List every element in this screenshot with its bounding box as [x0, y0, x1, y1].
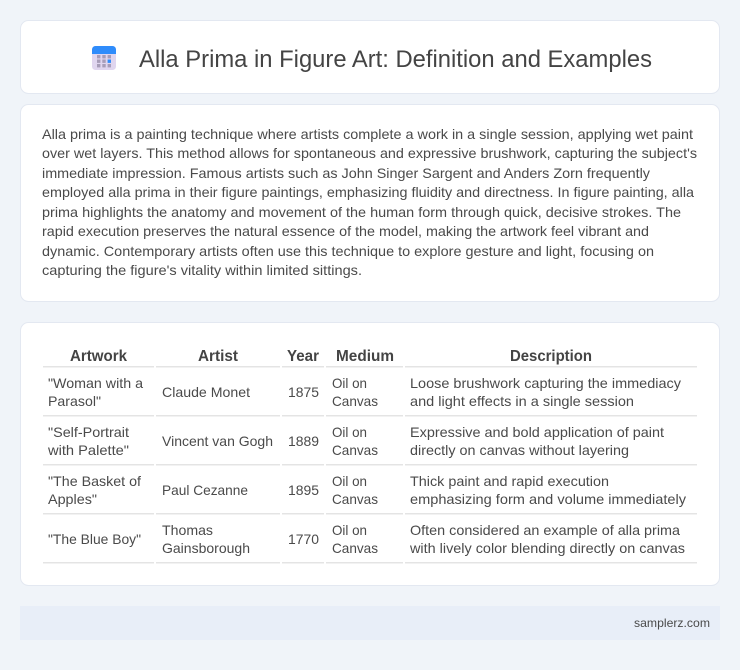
- table row: The Blue Boy: Oil on: [332, 522, 367, 538]
- table row: Woman with a Parasol: Parasol": [48, 393, 101, 409]
- text block: definition paragraph: Alla prima is a painting technique where artists complete a work in a single session, applying wet paint: [42, 126, 693, 142]
- table row: The Basket of Apples: Canvas: [332, 491, 378, 507]
- table row: Self-Portrait with Palette: Canvas: [332, 442, 378, 458]
- footer: [20, 606, 720, 640]
- table row: The Blue Boy: 1770: [288, 531, 319, 547]
- footer: samplerz.com: [634, 616, 710, 630]
- table row: The Basket of Apples: "The Basket of: [48, 473, 141, 489]
- table row: The Basket of Apples: Oil on: [332, 473, 367, 489]
- table row: Woman with a Parasol: Oil on: [332, 375, 367, 391]
- table row: Self-Portrait with Palette: [47, 424, 664, 458]
- table row: Self-Portrait with Palette: "Self-Portrait: [48, 424, 129, 440]
- table row: Woman with a Parasol: Loose brushwork capturing the immediacy: [410, 375, 681, 391]
- table header row: Artwork: [70, 348, 127, 365]
- table row: Woman with a Parasol: Canvas: [332, 393, 378, 409]
- table row: The Blue Boy: Thomas: [162, 522, 213, 538]
- text block: definition paragraph: capturing the figure's vitality within limited sittings.: [42, 262, 362, 278]
- panel: artwork table: [20, 322, 720, 586]
- table row: Woman with a Parasol: [48, 375, 681, 409]
- text block: definition paragraph: dynamic. Contemporary artists often use this technique to explore gesture and light, focusing on: [42, 243, 654, 259]
- table row: Self-Portrait with Palette: Oil on: [332, 424, 367, 440]
- table row: The Blue Boy: "The Blue Boy": [48, 531, 141, 547]
- table header row: Artist: [198, 348, 238, 365]
- table row: Self-Portrait with Palette: with Palette": [47, 442, 129, 458]
- text block: definition paragraph: over wet layers. This method allows for spontaneous and expressive brushwork, capturing the subject's: [42, 145, 697, 161]
- table row: The Blue Boy: with lively color blending directly on canvas: [409, 540, 685, 556]
- table header row: Medium: [336, 348, 394, 365]
- panel: definition text: [20, 104, 720, 302]
- table row: Self-Portrait with Palette: Vincent van Gogh: [162, 433, 273, 449]
- table row: Self-Portrait with Palette: 1889: [288, 433, 319, 449]
- table row: The Basket of Apples: 1895: [288, 482, 319, 498]
- text block: definition paragraph: rapid execution preserves the natural essence of the model, making the artwork feel vibrant and: [42, 223, 649, 239]
- table row: The Basket of Apples: Apples": [48, 491, 97, 507]
- table row: Self-Portrait with Palette: Expressive and bold application of paint: [410, 424, 664, 440]
- table row: Woman with a Parasol: and light effects in a single session: [410, 393, 634, 409]
- table row: The Basket of Apples: [48, 473, 686, 507]
- table row: The Basket of Apples: Paul Cezanne: [162, 482, 248, 498]
- table row: The Blue Boy: Canvas: [332, 540, 378, 556]
- text block: definition paragraph: prima highlights the anatomy and movement of the human form through quick, decisive strokes. The: [42, 204, 681, 220]
- table header row: [70, 348, 592, 365]
- table row: The Basket of Apples: Thick paint and rapid execution: [410, 473, 609, 489]
- table row: Self-Portrait with Palette: directly on canvas without layering: [410, 442, 629, 458]
- icon: calendar: [92, 46, 116, 70]
- table row: The Blue Boy: [48, 522, 685, 556]
- text block: definition paragraph: immediate impression. Famous artists such as John Singer Sargent and Anders Zorn frequently: [42, 165, 650, 181]
- panel: title header: [20, 20, 720, 94]
- table header row: Description: [510, 348, 592, 365]
- table header row: Year: [287, 348, 319, 365]
- table row: Woman with a Parasol: 1875: [288, 384, 319, 400]
- title: Alla Prima in Figure Art: Definition and Examples: [139, 46, 652, 73]
- text block: definition paragraph: [42, 126, 697, 278]
- table row: The Basket of Apples: emphasizing form and volume immediately: [410, 491, 686, 507]
- table row: The Blue Boy: Often considered an example of alla prima: [410, 522, 680, 538]
- table row: Woman with a Parasol: "Woman with a: [48, 375, 143, 391]
- text block: definition paragraph: employed alla prima in their figure paintings, emphasizing fluidity and directness. In figure painting, alla: [42, 184, 694, 200]
- table row: The Blue Boy: Gainsborough: [162, 540, 250, 556]
- table row: Woman with a Parasol: Claude Monet: [162, 384, 250, 400]
